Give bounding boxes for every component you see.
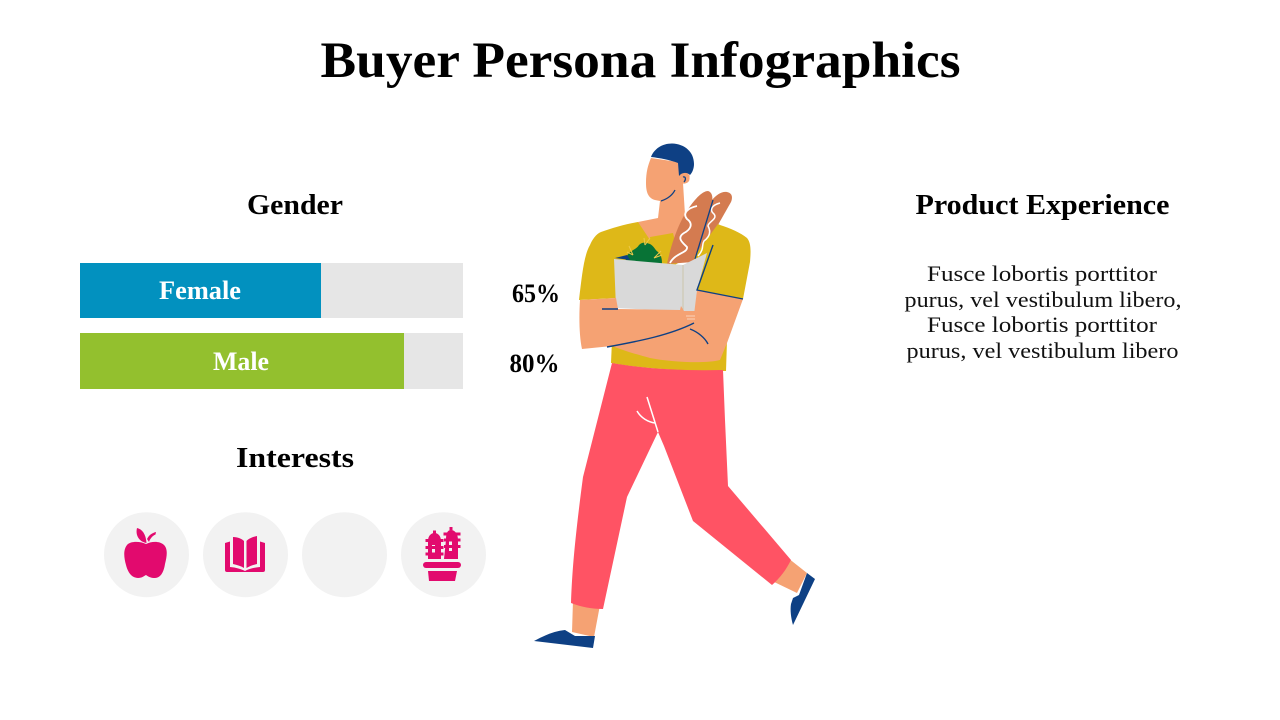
arms xyxy=(579,290,743,362)
smile and ear detail xyxy=(661,177,685,201)
icon: open book xyxy=(203,512,288,597)
body text: purus, vel vestibulum libero xyxy=(906,338,1178,363)
bar: male 80%: Male xyxy=(213,347,269,376)
bar: female 65% xyxy=(80,263,560,318)
shirt torso and left sleeve xyxy=(579,222,680,300)
greens xyxy=(625,238,662,265)
trousers xyxy=(571,363,791,609)
body text: purus, vel vestibulum libero, xyxy=(904,287,1182,312)
figure: man carrying grocery bag xyxy=(534,144,815,648)
panel: interests xyxy=(104,443,486,597)
neck and face xyxy=(638,158,700,262)
ear xyxy=(681,172,690,184)
front baguette xyxy=(667,191,720,264)
panel: product experience xyxy=(904,190,1182,363)
body text: Fusce lobortis porttitor xyxy=(927,312,1158,337)
front shoe xyxy=(791,573,815,625)
icon: apple xyxy=(104,512,189,597)
lower shirt xyxy=(611,340,727,371)
front foot skin xyxy=(770,558,807,593)
bar: male 80%: 80% xyxy=(510,349,560,378)
heading: gender: Gender xyxy=(247,190,343,221)
bar: female 65%: 65% xyxy=(512,279,560,308)
back shoe xyxy=(534,630,595,648)
heading: product experience: Product Experience xyxy=(916,190,1170,221)
back baguette xyxy=(690,192,732,262)
panel: gender xyxy=(80,190,560,389)
bar: female 65%: Female xyxy=(159,276,241,305)
bar: male 80% xyxy=(80,333,560,389)
body text xyxy=(904,261,1182,363)
right sleeve xyxy=(690,224,751,299)
hair xyxy=(651,144,694,176)
back leg skin xyxy=(572,600,600,637)
icon: cactus pot xyxy=(401,512,486,597)
heading: interests: Interests xyxy=(236,443,354,474)
fingers xyxy=(686,316,695,319)
arm outlines and sleeve trim xyxy=(602,245,743,347)
title: Buyer Persona Infographics xyxy=(320,33,960,89)
grocery bag xyxy=(614,253,707,312)
body text: Fusce lobortis porttitor xyxy=(927,261,1158,286)
icon: empty circle xyxy=(302,512,387,597)
trouser creases xyxy=(637,397,658,432)
